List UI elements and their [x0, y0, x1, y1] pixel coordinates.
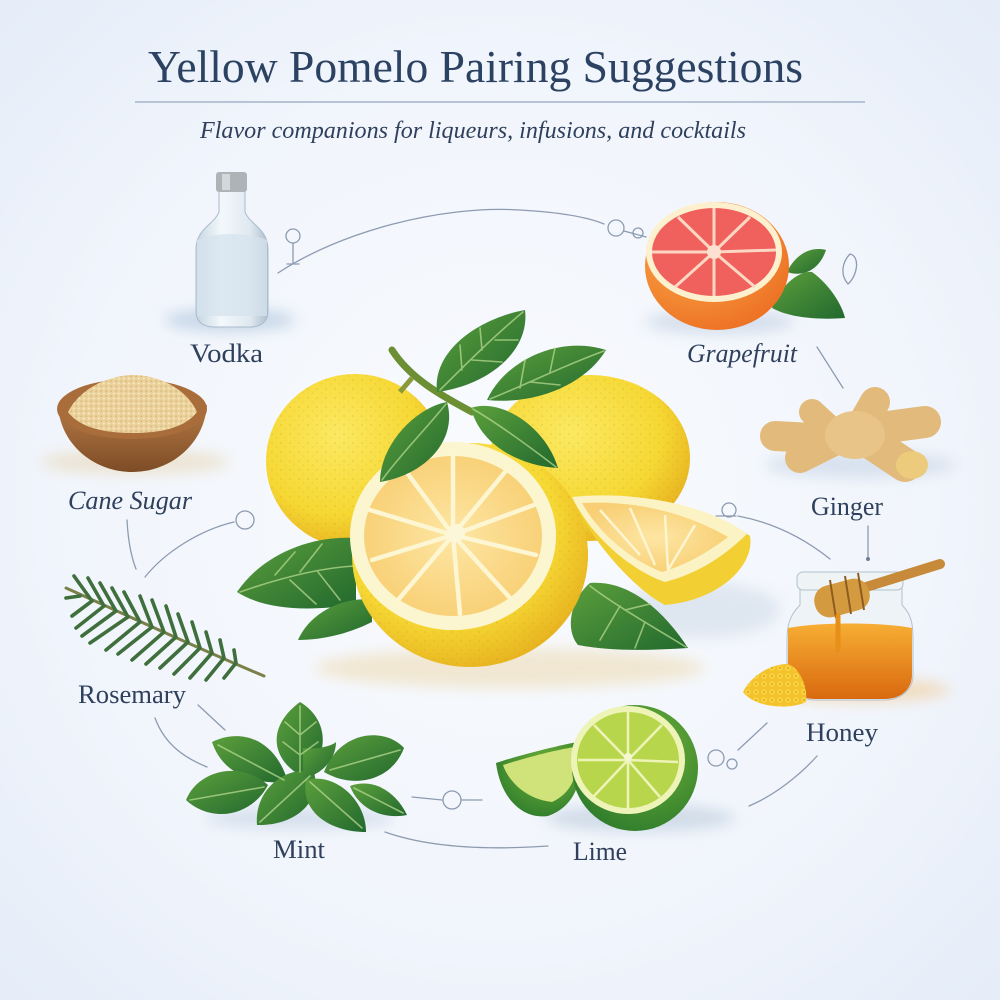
leaves [787, 249, 826, 274]
label: Grapefruit [687, 339, 798, 368]
item: ginger [765, 402, 955, 521]
whole lime half [572, 705, 698, 831]
branch [392, 350, 472, 412]
title: Yellow Pomelo Pairing Suggestions [148, 41, 803, 92]
bottle [196, 190, 268, 327]
label: Rosemary [78, 680, 186, 709]
central pomelo cluster [237, 310, 780, 688]
wedge [496, 742, 581, 816]
connector lines [127, 209, 870, 848]
wedge [572, 496, 750, 605]
item: lime [496, 705, 735, 866]
item: vodka [164, 172, 296, 368]
subtitle: Flavor companions for liqueurs, infusions, and cocktails [199, 118, 746, 144]
front cut pomelo [352, 443, 588, 667]
item: grapefruit [645, 202, 857, 368]
label: Honey [806, 718, 878, 747]
bowl [58, 405, 207, 472]
item: rosemary [66, 576, 264, 709]
dipper [850, 564, 940, 592]
segment lines [370, 456, 536, 614]
back right pomelo [490, 375, 690, 541]
top leaves [437, 310, 525, 392]
honeycomb [743, 664, 806, 707]
label: Mint [273, 835, 326, 864]
ground shadow [315, 648, 705, 688]
label: Lime [573, 837, 627, 866]
item: mint [186, 702, 407, 864]
lower leaves [237, 538, 356, 608]
back left pomelo [266, 374, 444, 548]
fruit [645, 202, 789, 330]
sugar [68, 375, 197, 433]
item: cane sugar [40, 375, 230, 515]
item: honey jar [743, 564, 950, 747]
shadow [164, 308, 296, 332]
label: Ginger [811, 492, 883, 521]
label: Vodka [190, 339, 264, 368]
label: Cane Sugar [68, 486, 193, 515]
jar [787, 585, 913, 700]
